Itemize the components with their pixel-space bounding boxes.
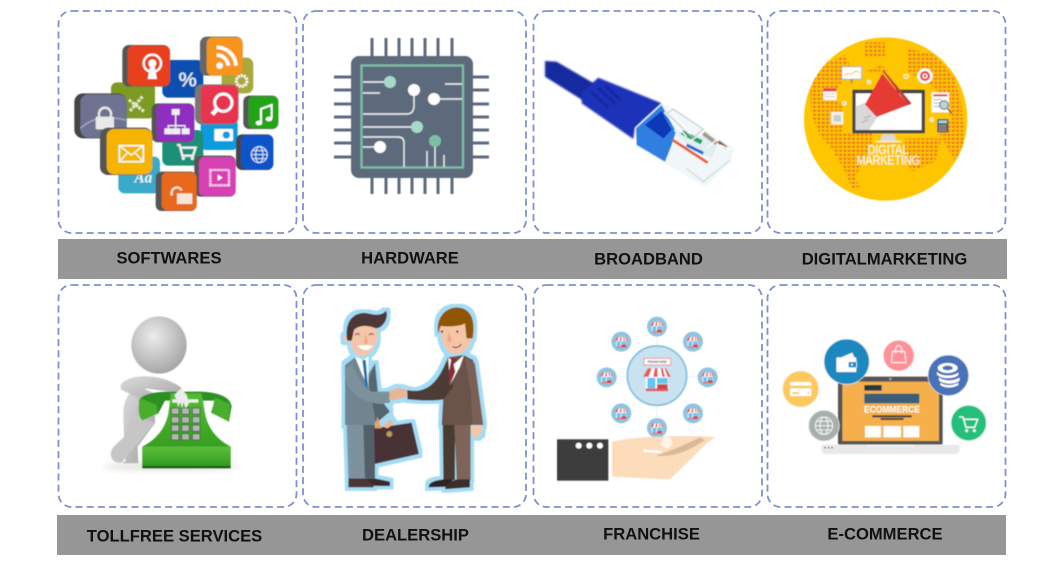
label: franchise: FRANCHISE — [603, 524, 700, 544]
panel: dealership — [303, 285, 526, 507]
left man — [344, 311, 408, 487]
coins badge — [928, 355, 969, 396]
panel: hardware — [303, 11, 526, 233]
icon: app cubes — [74, 37, 278, 211]
icon: two businessmen shaking hands — [344, 307, 483, 489]
panel: softwares — [58, 11, 296, 233]
label: hardware: HARDWARE — [361, 248, 459, 268]
icon: digital marketing globe: MARKETING — [857, 153, 920, 168]
globe badge — [809, 410, 839, 441]
briefcase — [374, 417, 419, 464]
icon: app cubes: % — [178, 69, 197, 92]
label: tollfree services: TOLLFREE SERVICES — [87, 526, 262, 546]
shopping cart badge — [951, 405, 986, 441]
label: dealership: DEALERSHIP — [362, 526, 469, 544]
shopping bag badge — [883, 340, 914, 371]
icon: franchise stores on a hand — [557, 317, 718, 481]
icon: franchise stores on a hand: FRANCHISE — [648, 360, 668, 364]
label bar: bottom row — [57, 515, 1006, 555]
icon: e-commerce laptop: ECOMMERCE — [864, 405, 920, 415]
panel: e-commerce — [768, 285, 1006, 507]
icon: person with green telephone — [102, 316, 238, 470]
wallet badge — [824, 339, 869, 384]
icon: ethernet cable — [545, 61, 734, 187]
label: e-commerce: E-COMMERCE — [827, 524, 943, 544]
panel: digital marketing — [768, 11, 1006, 233]
label bar: top row — [58, 239, 1007, 279]
label: digital marketing: DIGITALMARKETING — [802, 250, 967, 268]
icon: digital marketing globe — [804, 37, 967, 201]
icon: app cubes: Aa — [133, 169, 153, 186]
icon: microchip — [334, 38, 489, 194]
right man — [407, 307, 483, 489]
credit card badge — [783, 371, 819, 407]
panel: franchise — [534, 285, 762, 507]
panel: tollfree services — [58, 285, 296, 507]
icon: digital marketing globe: DIGITAL — [868, 142, 908, 157]
label: softwares: SOFTWARES — [116, 248, 222, 268]
icon: e-commerce laptop — [783, 339, 986, 454]
panel: broadband — [534, 11, 762, 233]
label: broadband: BROADBAND — [594, 250, 703, 268]
